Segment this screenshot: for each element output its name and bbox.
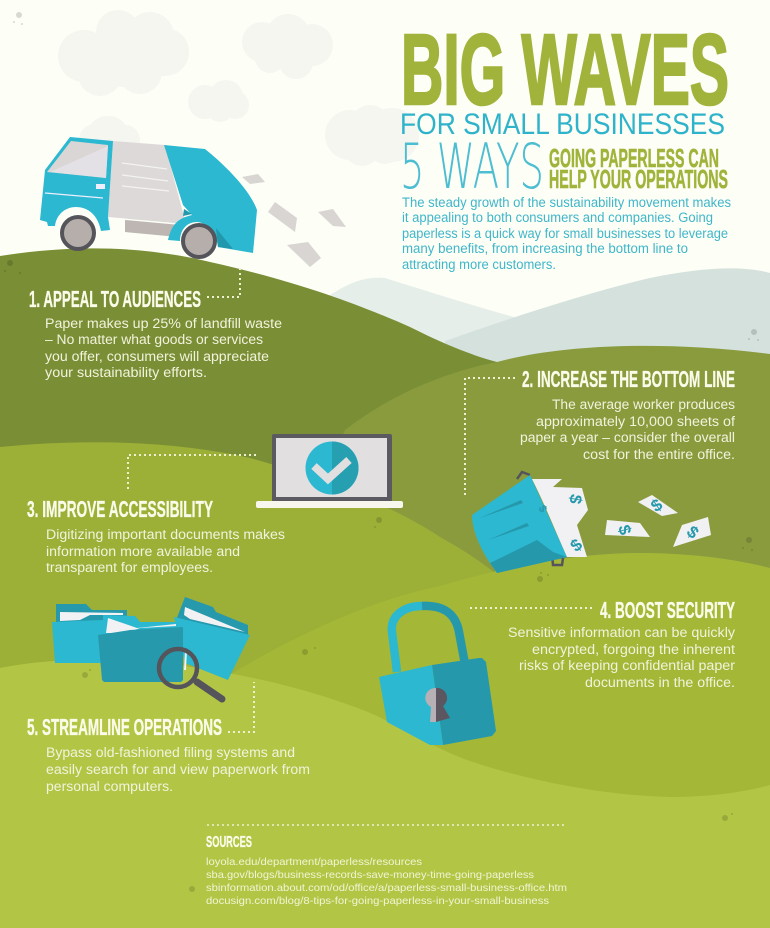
section 2: increase the bottom line: cost for the entire office.	[583, 447, 735, 462]
icon: dollar bills: $	[683, 522, 703, 543]
sources	[206, 825, 567, 907]
sources: docusign.com/blog/8-tips-for-going-paperless-in-your-small-business	[206, 895, 549, 907]
sources: loyola.edu/department/paperless/resources	[206, 856, 422, 868]
icon: padlock	[379, 606, 496, 745]
hill: green left	[0, 442, 580, 780]
sources: sba.gov/blogs/business-records-save-money-time-going-paperless	[206, 869, 534, 881]
section 4: boost security: encrypted, forgoing the inherent	[532, 642, 735, 657]
icon: garbage can with money: $	[567, 535, 586, 556]
section 5: streamline operations: easily search for and view paperwork from	[46, 762, 310, 777]
sources: sbinformation.about.com/od/office/a/paperless-small-business-office.htm	[206, 882, 567, 894]
hill: green right	[190, 553, 770, 800]
section 4: boost security: risks of keeping confidential paper	[519, 658, 736, 673]
distant hills	[315, 268, 770, 420]
icon: garbage truck	[40, 137, 257, 257]
icon: folders and magnifier	[52, 597, 250, 699]
section 1: appeal to audiences: 1. APPEAL TO AUDIENCES	[29, 286, 201, 312]
heading: 5 ways: 5 WAYS	[400, 130, 544, 203]
section 2: increase the bottom line: paper a year – consider the overall	[520, 430, 735, 445]
section 1: appeal to audiences	[29, 268, 282, 380]
icon: laptop with check	[256, 434, 403, 508]
icon: garbage can with money: $	[565, 493, 586, 506]
section 5: streamline operations: Bypass old-fashioned filing systems and	[46, 745, 295, 760]
section 4: boost security: documents in the office.	[585, 675, 735, 690]
section 5: streamline operations: personal computers.	[46, 779, 173, 794]
icon: dollar bills: $	[647, 495, 666, 516]
section 3: improve accessibility: Digitizing important documents makes	[46, 527, 285, 542]
section 4: boost security: Sensitive information can be quickly	[508, 625, 735, 640]
section 1: appeal to audiences: Paper makes up 25% of landfill waste	[45, 316, 282, 331]
subtitle: for small businesses: FOR SMALL BUSINESSES	[400, 108, 725, 141]
hill: olive right	[250, 346, 770, 640]
icon: garbage can with money	[472, 472, 588, 573]
intro paragraph: paperless is a quick way for small businesses to leverage	[402, 226, 728, 241]
icon: dollar bills	[605, 495, 711, 547]
section 2: increase the bottom line: approximately 10,000 sheets of	[536, 414, 735, 429]
section 3: improve accessibility	[27, 455, 285, 575]
intro paragraph	[402, 195, 731, 272]
section 2: increase the bottom line	[465, 366, 735, 498]
section 5: streamline operations: 5. STREAMLINE OPERATIONS	[27, 714, 222, 740]
section 1: appeal to audiences: your sustainability efforts.	[45, 365, 207, 380]
intro paragraph: The steady growth of the sustainability movement makes	[402, 195, 731, 210]
section 1: appeal to audiences: you offer, consumers will appreciate	[45, 349, 269, 364]
section 1: appeal to audiences: – No matter what goods or services	[45, 332, 263, 347]
section 3: improve accessibility: information more available and	[46, 544, 240, 559]
icon: dollar bills: $	[614, 523, 635, 537]
hill: bottom foreground	[0, 660, 770, 928]
sources: SOURCES	[206, 834, 252, 851]
intro paragraph: attracting more customers.	[402, 257, 556, 272]
intro paragraph: many benefits, from increasing the bottom line to	[402, 241, 688, 256]
section 2: increase the bottom line: The average worker produces	[552, 397, 735, 412]
section 3: improve accessibility: transparent for employees.	[46, 560, 213, 575]
section 3: improve accessibility: 3. IMPROVE ACCESSIBILITY	[27, 496, 213, 522]
intro paragraph: it appealing to both consumers and companies. Going	[402, 210, 713, 225]
section 4: boost security	[470, 597, 736, 690]
clouds	[58, 10, 419, 166]
icon: garbage can with money: $	[536, 503, 549, 515]
heading: going paperless	[549, 143, 728, 194]
icon: flying paper	[242, 174, 346, 267]
hill: dark green	[0, 248, 497, 560]
section 5: streamline operations	[27, 682, 310, 794]
